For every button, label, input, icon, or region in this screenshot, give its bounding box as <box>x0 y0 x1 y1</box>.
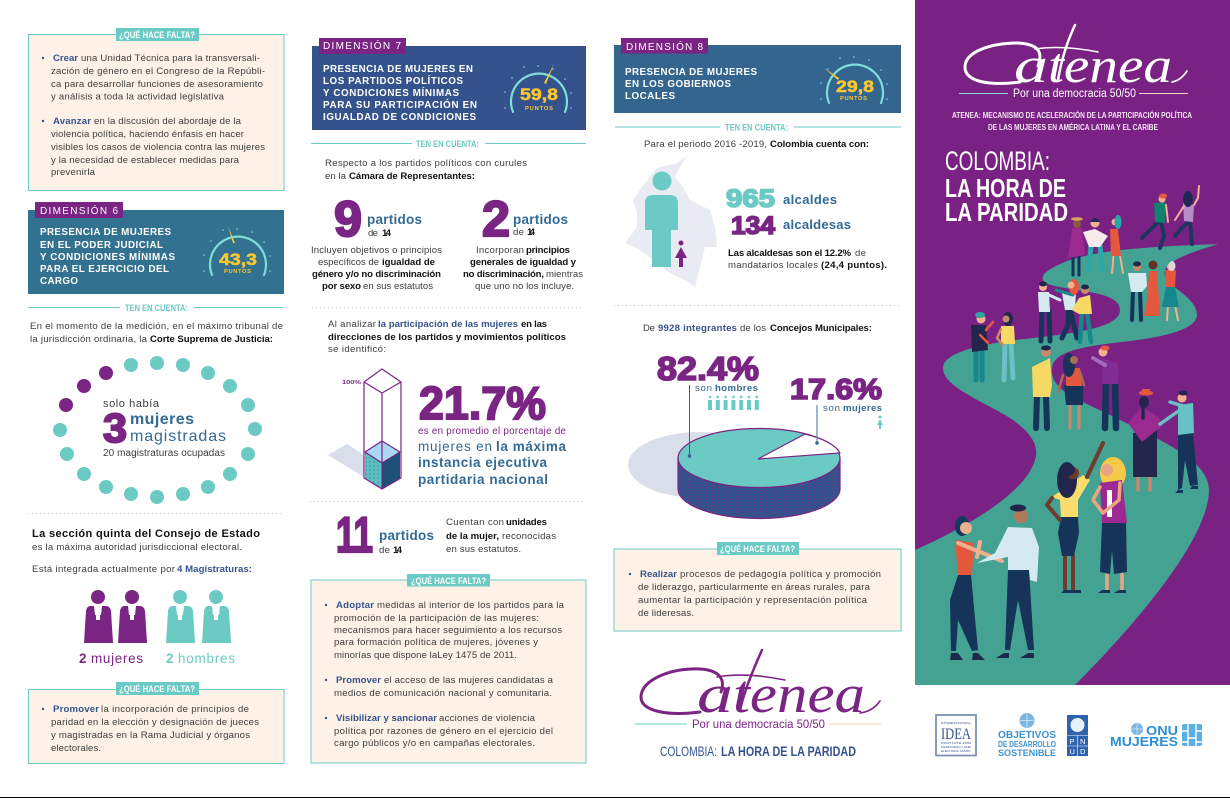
stat: 11 partidos <box>336 507 556 563</box>
logo: PNUD <box>1067 715 1088 756</box>
panel: dimensión 7: PRESENCIA DE MUJERES EN <box>323 64 473 75</box>
stat: 2 partidos: de <box>513 227 524 238</box>
text block: cámara de representantes <box>325 158 527 182</box>
text block: participación en direcciones <box>328 319 566 355</box>
chart: pastel de concejos municipales: 82.4% <box>657 350 759 387</box>
stat: alcaldes y alcaldesas: mandatarios locales <box>728 260 818 271</box>
panel: dimensión 7: Y CONDICIONES MÍNIMAS <box>323 87 459 99</box>
chart: pastel de concejos municipales: son <box>695 383 712 394</box>
logo: PNUD: P <box>1070 737 1075 746</box>
panel: qué hace falta, legislativo: una Unidad Técnica para la transversali- <box>81 53 260 64</box>
panel: qué hace falta, judicial: paridad en la elección y designación de jueces <box>51 717 259 728</box>
text block: sección quinta: es la máxima autoridad jurisdiccional electoral. <box>32 542 242 553</box>
panel: qué hace falta, gobiernos locales: ¿QUÉ HACE FALTA? <box>720 544 795 555</box>
text block: participación en direcciones: Al analizar <box>328 319 377 330</box>
stat: 21.7%: 21.7% <box>419 377 546 429</box>
panel: dimensión 8: DIMENSIÓN 8 <box>626 40 703 53</box>
panel: qué hace falta, partidos: para formación política de mujeres, jóvenes y <box>334 637 538 648</box>
stat: 9 partidos: igualdad de <box>382 257 435 268</box>
panel: qué hace falta, judicial: ¿QUÉ HACE FALTA? <box>119 684 195 695</box>
stat: 2 partidos: principios <box>526 245 570 256</box>
text block: corte suprema: En el momento de la medición, en el máximo tribunal de <box>30 321 283 332</box>
text block: periodo 2016-2019: Para el periodo 2016 -2019, <box>644 139 767 150</box>
stat: 21.7%: la máxima <box>496 439 566 454</box>
chart: prisma 21.7% <box>328 369 401 489</box>
text block: participación en direcciones: direcciones de los partidos y movimientos políticos <box>328 332 566 343</box>
icons: magistraturas: mujeres <box>91 651 143 666</box>
panel: dimensión 7: LOS PARTIDOS POLÍTICOS <box>323 75 463 87</box>
panel: qué hace falta, legislativo: visibles los casos de violencia contra las mujeres <box>51 142 265 153</box>
panel: qué hace falta, partidos: mecanismos para hacer seguimiento a los recursos <box>334 625 562 636</box>
panel: dimensión 6: EN EL PODER JUDICIAL <box>40 240 163 251</box>
panel: dimensión 6: DIMENSIÓN 6 <box>40 204 118 217</box>
logo: atenea, portada: Por una democracia 50/50 <box>1013 88 1136 100</box>
panel: qué hace falta, legislativo: y la necesidad de establecer medidas para <box>51 155 240 166</box>
panel: qué hace falta, partidos: el acceso de las mujeres candidatas a <box>384 675 554 686</box>
stat: 2 partidos: mientras <box>546 269 583 280</box>
stat: alcaldes y alcaldesas: alcaldes <box>783 192 837 207</box>
gauge: 43,3 puntos: PUNTOS <box>224 269 251 275</box>
stat: 11 partidos: de la mujer, <box>446 531 499 542</box>
logo: Objetivos de Desarrollo Sostenible: OBJETIVOS <box>998 730 1056 741</box>
text block: sección quinta: 4 Magistraturas: <box>177 564 252 575</box>
panel: dimensión 6: PARA EL EJERCICIO DEL <box>40 264 169 275</box>
text block: sección quinta <box>32 528 260 575</box>
panel: qué hace falta, partidos: política por razones de género en el ejercicio del <box>334 726 553 737</box>
logo: International IDEA <box>936 715 976 756</box>
stat: 11 partidos: reconocidas <box>502 531 556 542</box>
stat: 2 partidos <box>463 191 583 292</box>
gauge: 59,8 puntos: PUNTOS <box>525 106 553 112</box>
text block: corte suprema: Corte Suprema de Justicia: <box>150 334 273 345</box>
panel: qué hace falta, gobiernos locales: Realizar <box>640 569 677 580</box>
panel: dimensión 7: PARA SU PARTICIPACIÓN EN <box>323 99 477 111</box>
panel: qué hace falta, legislativo: zación de género en el Congreso de la Repúbli- <box>51 66 265 77</box>
text block: cámara de representantes: Respecto a los partidos políticos con curules <box>325 158 527 169</box>
illustration: camino <box>915 244 1218 685</box>
stat: 9 partidos: Incluyen objetivos o principios <box>311 245 442 256</box>
panel: dimensión 6: PRESENCIA DE MUJERES <box>40 227 171 238</box>
stat: alcaldes y alcaldesas: 134 <box>731 212 775 240</box>
gauge: 59,8 puntos: 59,8 <box>520 85 558 104</box>
stat: alcaldes y alcaldesas: Las alcaldesas son el 12.2% <box>728 248 851 259</box>
illustration: grupo del sombrero <box>1068 215 1123 275</box>
gauge: 29,8 puntos <box>821 57 887 103</box>
panel: qué hace falta, partidos: cargo públicos y/o en campañas electorales. <box>334 738 535 749</box>
illustration: mujer con chal y mujer de azul <box>1128 389 1198 493</box>
heading: ten en cuenta, corte suprema: TEN EN CUENTA: <box>125 303 188 314</box>
gauge: 29,8 puntos: 29,8 <box>836 77 874 96</box>
chart: círculo de magistraturas: 3 <box>103 405 127 451</box>
title: Colombia, la hora de la paridad <box>945 146 1068 227</box>
heading: ten en cuenta, partidos: TEN EN CUENTA: <box>416 139 479 150</box>
stat: 11 partidos: 14 <box>393 545 403 556</box>
panel: qué hace falta, partidos <box>311 574 586 763</box>
panel: dimensión 6: Y CONDICIONES MÍNIMAS <box>40 251 175 263</box>
logo: Objetivos de Desarrollo Sostenible: SOSTENIBLE <box>998 748 1056 759</box>
stat: 9 partidos: 9 <box>334 191 362 247</box>
text block: periodo 2016-2019: Colombia cuenta con: <box>770 139 869 150</box>
logo: atenea, contraportada: Por una democracia 50/50 <box>692 717 825 731</box>
logo: International IDEA: DEMOCRACY AND <box>941 745 972 749</box>
panel: qué hace falta, judicial: Promover <box>53 704 99 715</box>
logo: atenea, portada <box>959 25 1188 100</box>
illustration: pareja saludándose <box>950 504 1039 660</box>
stat: 11 partidos: en sus estatutos. <box>446 544 521 555</box>
panel: dimensión 8: LOCALES <box>625 91 675 102</box>
stat: 21.7%: mujeres en <box>418 439 492 454</box>
panel: dimensión 8 <box>614 38 901 113</box>
stat: 9 partidos: partidos <box>367 212 422 227</box>
text block: mecanismo de aceleración: DE LAS MUJERES EN AMÉRICA LATINA Y EL CARIBE <box>988 123 1159 132</box>
panel: qué hace falta, legislativo <box>28 28 284 190</box>
title: Colombia, la hora de la paridad: LA HORA DE <box>945 173 1066 203</box>
panel: qué hace falta, partidos: Promover <box>336 675 381 686</box>
stat: 2 partidos: no discriminación, <box>463 269 544 280</box>
stat: 21.7%: partidaria nacional <box>418 472 548 487</box>
logo: Objetivos de Desarrollo Sostenible: DE DESARROLLO <box>998 740 1056 749</box>
stat: 11 partidos: Cuentan con <box>446 517 504 528</box>
panel: qué hace falta, legislativo: prevenirla <box>51 167 96 178</box>
panel: qué hace falta, legislativo: Avanzar <box>53 116 91 127</box>
panel: qué hace falta, partidos: minorías que dispone laLey 1475 de 2011. <box>334 650 517 661</box>
panel: qué hace falta, partidos: Adoptar <box>336 600 374 611</box>
stat: 9 partidos: de <box>368 228 378 239</box>
text block: cámara de representantes: Cámara de Representantes: <box>349 171 475 182</box>
panel: dimensión 6 <box>28 202 284 294</box>
chart: círculo de magistraturas <box>53 356 262 504</box>
panel: dimensión 7: IGUALDAD DE CONDICIONES <box>323 112 476 123</box>
chart: círculo de magistraturas: 20 magistraturas ocupadas <box>103 448 225 459</box>
panel: qué hace falta, judicial <box>28 682 284 764</box>
panel: qué hace falta, legislativo: en la discusión del abordaje de la <box>94 116 242 127</box>
logo: atenea, portada: tenea <box>1048 37 1172 93</box>
panel: qué hace falta, legislativo: Crear <box>53 53 78 64</box>
text block: cámara de representantes: en la <box>325 171 347 182</box>
stat: 2 partidos: generales de igualdad y <box>470 257 577 268</box>
icons: magistraturas: 2 <box>79 651 87 666</box>
text block: sección quinta: Está integrada actualmente por <box>32 564 176 575</box>
panel: dimensión 7: DIMENSIÓN 7 <box>323 39 401 52</box>
stat: 9 partidos: específicos de <box>318 257 379 268</box>
panel: dimensión 8: PRESENCIA DE MUJERES <box>625 67 757 78</box>
icons: magistraturas <box>79 590 235 666</box>
stat: 2 partidos: que uno no los incluye. <box>475 281 574 292</box>
text block: participación en direcciones: la participación de las mujeres <box>378 319 518 330</box>
panel: qué hace falta, judicial: la incorporación de principios de <box>101 704 249 715</box>
panel: qué hace falta, partidos: ¿QUÉ HACE FALTA? <box>411 576 486 587</box>
logo: PNUD: N <box>1080 737 1085 746</box>
logo: International IDEA: INSTITUTE FOR <box>941 741 972 745</box>
stat: 9 partidos: género y/o no discriminación <box>312 269 441 280</box>
panel: qué hace falta, gobiernos locales <box>614 542 901 631</box>
stat: 9 partidos <box>311 191 442 292</box>
logo: PNUD: D <box>1080 747 1086 756</box>
text block: participación en direcciones: se identificó: <box>328 344 386 355</box>
stat: alcaldes y alcaldesas: (24,4 puntos). <box>821 260 887 271</box>
panel: qué hace falta, partidos: medidas al interior de los partidos para la <box>377 600 565 611</box>
text block: sección quinta: La sección quinta del Consejo de Estado <box>32 528 260 540</box>
text block: participación en direcciones: en las <box>521 319 547 330</box>
illustration: mujer señalando <box>1047 443 1103 593</box>
text block: mecanismo de aceleración <box>952 111 1192 132</box>
illustration: mujer rubia <box>1093 457 1127 593</box>
icons: magistraturas: hombres <box>178 651 235 666</box>
panel: qué hace falta, partidos: acciones de violencia <box>439 713 536 724</box>
logo: Objetivos de Desarrollo Sostenible <box>998 713 1056 759</box>
panel: qué hace falta, gobiernos locales: de lideresas. <box>638 608 694 619</box>
illustration: grupo central <box>1038 279 1092 342</box>
stat: 2 partidos: partidos <box>513 212 568 227</box>
stat: 9 partidos: 14 <box>382 228 392 239</box>
chart: pastel de concejos municipales: 17.6% <box>790 374 882 406</box>
logo: atenea, contraportada: a <box>697 664 733 724</box>
chart: pastel de concejos municipales <box>628 350 883 518</box>
logo: atenea, contraportada: LA HORA DE LA PARIDAD <box>721 743 856 759</box>
logo: ONU Mujeres: MUJERES <box>1110 734 1178 749</box>
logo: ONU Mujeres: ONU <box>1146 723 1178 738</box>
stat: alcaldes y alcaldesas: de <box>855 248 866 259</box>
panel: qué hace falta, gobiernos locales: aumentar la participación y representación política <box>638 595 868 606</box>
gauge: 43,3 puntos: 43,3 <box>219 250 257 269</box>
logo: atenea, contraportada: COLOMBIA: <box>660 743 717 759</box>
stat: 2 partidos: 2 <box>482 191 510 247</box>
panel: qué hace falta, partidos: medios de comunicación nacional y comunitaria. <box>334 688 552 699</box>
panel: dimensión 6: CARGO <box>40 276 78 287</box>
chart: prisma 21.7%: 100% <box>342 380 361 386</box>
logo: International IDEA: INTERNATIONAL <box>941 721 971 725</box>
title: Colombia, la hora de la paridad: COLOMBIA: <box>945 146 1050 176</box>
chart: círculo de magistraturas: solo había <box>103 398 160 410</box>
icon: mapa de Colombia con figuras <box>625 156 717 287</box>
stat: alcaldes y alcaldesas: 965 <box>726 185 775 213</box>
stat: 11 partidos: unidades <box>506 517 547 528</box>
text block: corte suprema <box>30 321 283 345</box>
illustration: grupo de la camisa amarilla <box>1032 346 1118 428</box>
stat: 21.7% <box>418 377 567 487</box>
panel: qué hace falta, judicial: electorales. <box>51 743 101 754</box>
stat: 2 partidos: Incorporan <box>476 245 524 256</box>
heading: ten en cuenta, gobiernos locales: TEN EN CUENTA: <box>725 122 788 134</box>
gauge: 29,8 puntos: PUNTOS <box>840 96 867 102</box>
stat: alcaldes y alcaldesas <box>726 185 887 271</box>
gauge: 59,8 puntos <box>505 64 571 112</box>
panel: qué hace falta, legislativo: y análisis a toda la actividad legislativa <box>51 92 225 102</box>
panel: qué hace falta, partidos: promoción de la participación de las mujeres: <box>334 613 539 624</box>
panel: dimensión 8: EN LOS GOBIERNOS <box>625 79 731 90</box>
illustration: personas corriendo <box>1142 186 1199 248</box>
stat: 11 partidos: de <box>379 545 390 556</box>
text block: concejos municipales: De <box>643 323 655 334</box>
panel: dimensión 7 <box>312 38 586 130</box>
stat: alcaldes y alcaldesas: alcaldesas <box>783 217 851 232</box>
stat: 21.7%: es en promedio el porcentaje de <box>418 426 567 437</box>
chart: pastel de concejos municipales: son <box>823 403 840 414</box>
logo: atenea, portada: a <box>1014 37 1048 93</box>
text block: concejos municipales: 9928 integrantes <box>658 323 737 334</box>
logo: International IDEA: ELECTORAL ASSIST. <box>941 749 971 753</box>
panel: qué hace falta, gobiernos locales: de liderazgo, particularmente en áreas rurales, para <box>638 582 871 593</box>
logo: atenea, contraportada <box>635 650 881 759</box>
logo: ONU Mujeres <box>1110 723 1202 749</box>
text block: concejos municipales: de los <box>740 323 766 334</box>
icons: magistraturas: 2 <box>166 651 174 666</box>
text block: concejos municipales: Concejos Municipales: <box>770 323 872 334</box>
title: Colombia, la hora de la paridad: LA PARIDAD <box>945 197 1068 227</box>
panel: qué hace falta, legislativo: violencia política, haciendo énfasis en hacer <box>51 129 245 140</box>
logo: International IDEA: IDEA <box>941 726 971 743</box>
text block: corte suprema: la jurisdicción ordinaria, la <box>30 334 148 345</box>
stat: 9 partidos: por sexo <box>322 281 361 292</box>
stat: 11 partidos: 11 <box>336 507 373 563</box>
gauge: 43,3 puntos <box>204 226 270 275</box>
stat: 11 partidos: partidos <box>379 528 434 543</box>
illustration: grupo del vestido rojo <box>1128 260 1179 320</box>
chart: pastel de concejos municipales: mujeres <box>843 403 882 414</box>
panel: qué hace falta, gobiernos locales: procesos de pedagogía política y promoción <box>680 569 881 580</box>
stat: 21.7%: instancia ejecutiva <box>418 455 547 470</box>
logo: PNUD: U <box>1070 747 1075 756</box>
logo: atenea, contraportada: tenea <box>733 664 865 724</box>
stat: 9 partidos: en sus estatutos <box>363 281 433 292</box>
panel: portada morada <box>915 0 1230 685</box>
chart: pastel de concejos municipales: hombres <box>715 383 758 394</box>
chart: círculo de magistraturas: magistradas <box>130 428 226 445</box>
panel: qué hace falta, judicial: y magistradas en la Rama Judicial y órganos <box>51 730 250 741</box>
chart: círculo de magistraturas: mujeres <box>130 411 194 428</box>
stat: 2 partidos: 14 <box>527 227 536 238</box>
panel: qué hace falta, legislativo: ¿QUÉ HACE FALTA? <box>119 30 195 41</box>
illustration: pareja izquierda <box>971 312 1015 380</box>
panel: qué hace falta, legislativo: ca para desarrollar funciones de asesoramiento <box>51 79 263 90</box>
panel: qué hace falta, partidos: Visibilizar y sancionar <box>336 713 437 724</box>
